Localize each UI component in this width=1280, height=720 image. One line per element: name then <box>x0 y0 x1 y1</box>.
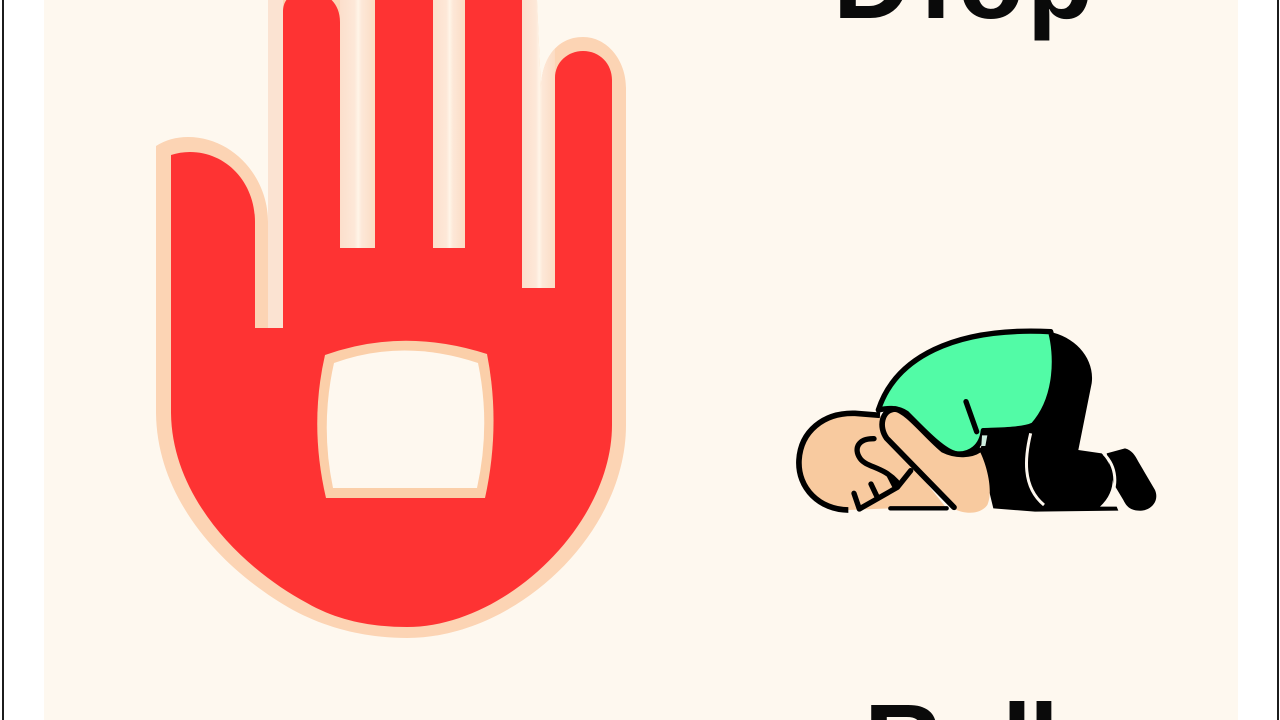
hand peach outline <box>156 0 626 638</box>
head outline <box>799 413 880 510</box>
green shirt <box>878 331 1054 454</box>
icon: red stop hand <box>156 0 626 638</box>
foot <box>1107 448 1156 511</box>
leg highlights <box>1026 433 1115 505</box>
trousers <box>980 332 1118 512</box>
head and body skin <box>798 413 947 510</box>
palm window opening <box>327 350 484 488</box>
icon: person curled up protecting head <box>798 331 1156 513</box>
sleeve crease <box>966 402 977 432</box>
palm window outline <box>317 341 494 498</box>
ground line left <box>890 502 947 515</box>
hand red fill <box>171 0 612 627</box>
arm skin <box>882 409 990 513</box>
sliver of light at the sleeve <box>981 435 987 446</box>
gaps between fingers <box>268 0 283 328</box>
arm outline <box>882 409 979 507</box>
ear <box>857 439 897 482</box>
hand fingers <box>854 471 911 509</box>
